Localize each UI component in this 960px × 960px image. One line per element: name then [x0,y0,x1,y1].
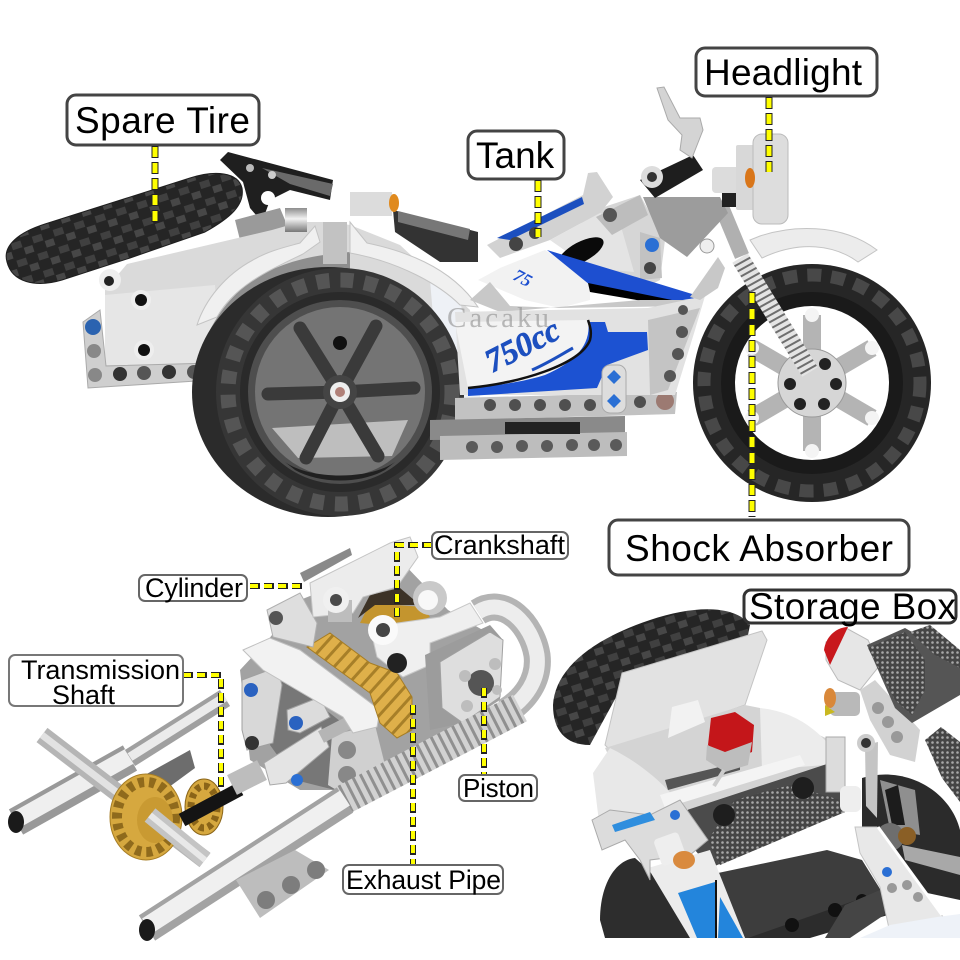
storage box walls [593,700,840,830]
seat post [285,208,307,232]
side panel [447,296,705,413]
callout: spare tire: Spare Tire [75,100,250,141]
callout: exhaust pipe [343,705,503,895]
cross link [602,365,626,413]
blinker mount and orange lamp [592,800,708,880]
front wheel [693,264,931,502]
blue striped fairing [648,850,745,938]
front fender [750,228,877,262]
middle shaft [232,720,354,786]
front wheel spokes [752,315,872,451]
perforated footboards [867,625,960,802]
cross bar [42,735,205,860]
tank: 75 [510,265,535,291]
headlight [712,134,788,224]
upper transmission shaft [8,697,225,833]
callout: tank [468,131,564,237]
front tire [600,858,695,938]
callout: headlight: Headlight [704,52,863,93]
callout: storage box: Storage Box [749,586,956,627]
callout: crankshaft: Crankshaft [434,530,565,560]
upright post [826,737,845,792]
spare tire [6,173,242,283]
side fairing corner [860,914,960,938]
right side wheel [862,775,960,900]
wheel arch shadow [205,252,350,350]
750cc decal: 750cc [479,312,566,380]
watermark: Cacaku [447,302,552,334]
callout: transmission shaft: Transmission [21,655,180,685]
handlebar and steering head [640,87,728,257]
callout: piston [459,688,537,803]
side links [242,667,330,750]
callout: headlight [696,48,877,172]
perforated cover [687,762,845,868]
panel: storage box detail illustration [553,609,960,938]
storage floor [718,850,890,938]
sidecar frame beam [83,310,212,388]
callout: spare tire [67,95,259,222]
panel: engine detail illustration [8,537,537,941]
exhaust pipe [139,607,537,941]
upper engine housing [267,537,483,677]
callout: exhaust pipe: Exhaust Pipe [346,865,501,895]
sidecar rear rack [220,152,478,262]
callout: cylinder: Cylinder [145,573,243,603]
side frame [857,680,920,762]
gold crank gears [307,633,412,738]
storage lid [605,631,767,752]
red canister [706,712,754,786]
white engine beam [243,638,380,733]
callout: crankshaft [397,530,568,617]
black axle [182,789,240,820]
motorcycle illustration [6,87,931,517]
sidecar body [99,222,480,400]
rear fender [197,222,478,325]
callout: shock absorber: Shock Absorber [625,528,893,569]
fork support [690,257,725,300]
front fork [722,208,810,372]
callout: shock absorber [609,292,909,575]
bevel gears [110,774,223,860]
tank [470,172,702,312]
rear wheel [192,267,464,517]
sidecar lamp [824,627,880,716]
callout: piston: Piston [463,773,534,803]
rear wheel spokes [268,326,414,458]
lower frame beams [430,392,677,460]
engine back block [240,560,500,795]
side strut [865,742,878,818]
callout: transmission shaft: Shaft [52,680,116,710]
callout: cylinder [139,573,306,603]
storage spare tire [553,609,750,745]
callout: tank: Tank [476,135,555,176]
piston plate [425,625,503,730]
callout: transmission shaft [9,655,221,787]
white side beam [825,786,943,938]
